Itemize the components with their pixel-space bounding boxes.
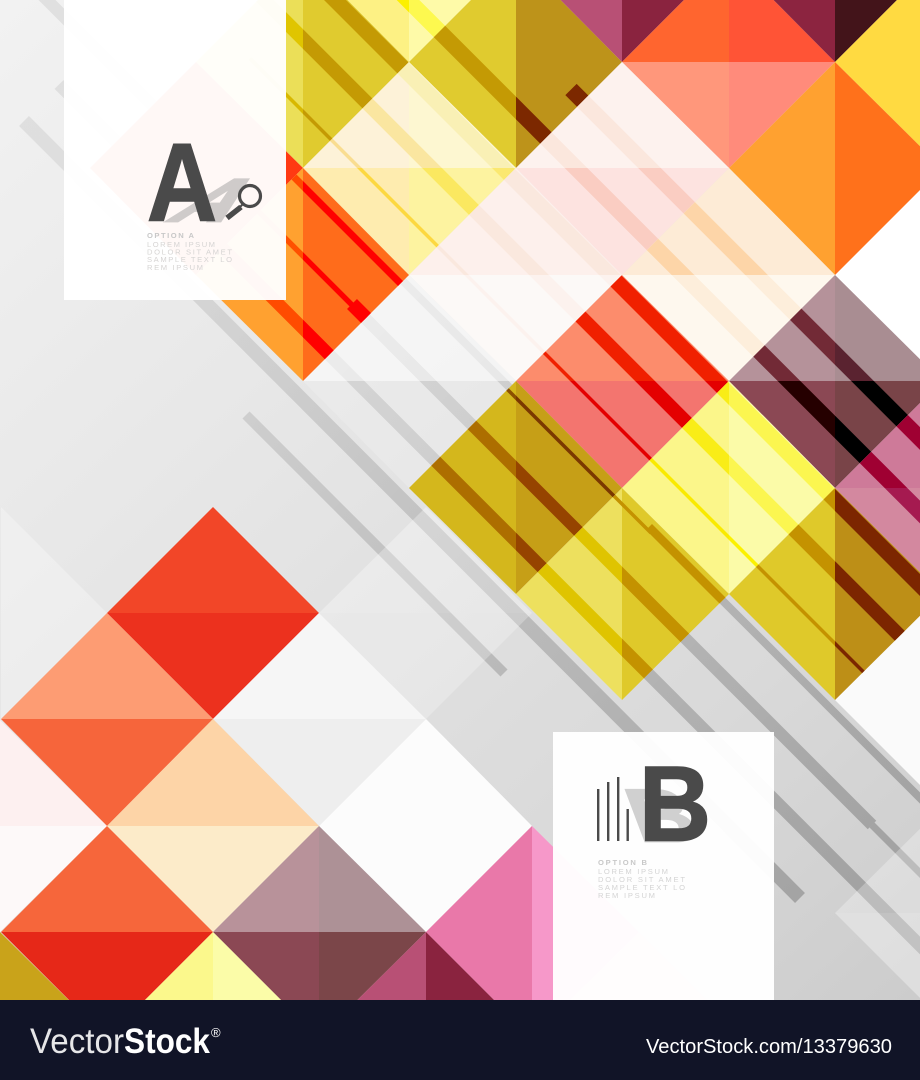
diamond: mauve [213, 826, 426, 1038]
top diamond cluster [90, 0, 920, 700]
diamond: red top [107, 507, 319, 719]
logo: VectorStock [30, 1022, 221, 1061]
text block: option B: REM IPSUM [598, 891, 655, 900]
text block: option A: REM IPSUM [147, 263, 203, 272]
diamond: plum bottom [319, 932, 532, 1038]
diamond: peach [622, 168, 835, 380]
diamond: mustard [409, 381, 622, 594]
text block: option A [147, 231, 232, 272]
diamond: near white [319, 719, 532, 932]
diamond: pale yellow bottom [107, 932, 319, 1038]
text block: option B [598, 858, 685, 900]
text block: option A: DOLOR SIT AMET [147, 248, 232, 256]
diamond: gold top [409, 0, 622, 168]
text block: option B: OPTION B [598, 858, 648, 867]
diamond: cream [303, 62, 516, 275]
diamond: dark maroon top [729, 0, 920, 62]
diamond: orange red [1, 826, 213, 1038]
letter B: B [639, 744, 711, 864]
text block: option B: SAMPLE TEXT LO [598, 883, 685, 892]
diamond: peach cream [107, 719, 319, 932]
diamond: dusky maroon [729, 275, 920, 488]
letter A shadow: A [150, 168, 283, 234]
diamond: faint pink under panel B [532, 932, 745, 1038]
icon: magnifying glass [227, 186, 260, 218]
footer bar [0, 1000, 920, 1080]
icon: vertical bars [597, 777, 629, 841]
diamond: gold corner [0, 932, 107, 1038]
diamond: orange left [221, 168, 409, 381]
diamond: red under panel A [90, 62, 303, 275]
letter A: A [147, 122, 217, 244]
logo: VectorStock: Stock [124, 1022, 210, 1061]
diamond: gold left [249, 0, 409, 168]
pale translucent diamonds [1, 168, 920, 1020]
text block: option A: OPTION A [147, 231, 195, 240]
diamond: bright yellow [622, 381, 835, 594]
image id url: VectorStock.com/13379630 [646, 1036, 892, 1058]
diamond: gold lower right [729, 488, 920, 700]
text block: option B: DOLOR SIT AMET [598, 875, 685, 884]
text block: option A: LOREM IPSUM [147, 240, 215, 249]
logo: VectorStock: Vector [30, 1022, 124, 1061]
diamond: pale pink edge [0, 720, 107, 932]
letter B shadow: B [615, 775, 708, 857]
diamond: salmon [516, 275, 729, 488]
text block: option B: LOREM IPSUM [598, 867, 668, 876]
diamond: yellow lower [516, 488, 729, 700]
diamond: pale yellow top [348, 0, 471, 62]
diamond: pink [426, 826, 639, 1038]
diamond: coral top [622, 0, 835, 168]
lower left diamond cluster [0, 507, 745, 1038]
panel: option A [64, 0, 286, 300]
diamond: pink right [835, 403, 920, 572]
text block: option A: SAMPLE TEXT LO [147, 255, 232, 264]
diamond: light grey centre [213, 613, 426, 826]
diamond: orange right [729, 62, 920, 275]
diamond: salmon orange [1, 613, 213, 826]
diamond: blush [516, 62, 729, 274]
diamond: yellow right [835, 0, 920, 168]
diamond: pale pink centre [409, 168, 622, 380]
panel: option B [553, 732, 774, 1000]
logo: VectorStock: ® [211, 1025, 221, 1040]
diamond: plum top [516, 0, 729, 62]
